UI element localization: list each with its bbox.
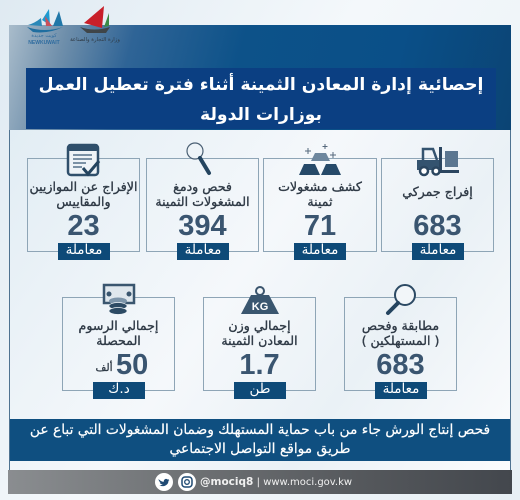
footer bar: [8, 470, 512, 494]
title: [39, 72, 483, 125]
label: [362, 318, 439, 348]
logo: ministry dhow: [80, 6, 110, 33]
logo text: New Kuwait: NEWKUWAIT: [28, 40, 60, 46]
card: total weight: [203, 297, 316, 391]
badge: [294, 243, 346, 260]
card: scales release: [27, 158, 140, 252]
label: [30, 179, 137, 210]
icon: twitter: [155, 473, 173, 491]
label: ثمينة: [307, 194, 333, 208]
badge: معاملة: [420, 242, 456, 258]
badge: معاملة: [383, 381, 419, 397]
label: [155, 179, 250, 210]
title: إحصائية إدارة المعادن الثمينة أثناء فترة تعطيل العمل: [39, 75, 483, 95]
number: 50: [116, 349, 148, 381]
card: precious items detection: [263, 158, 377, 252]
icon: KG weight: [241, 286, 279, 314]
main white panel: [9, 130, 511, 470]
social handle and website: @mociq8 | www.moci.gov.kw: [200, 476, 352, 488]
card: customs release: [381, 158, 494, 252]
badge: معاملة: [302, 242, 338, 258]
label: إجمالي الرسوم: [79, 318, 158, 333]
logo text: New Kuwait: [28, 33, 60, 46]
logo text: ministry: وزارة التجارة والصناعة: [70, 37, 120, 43]
header panel: [9, 25, 511, 130]
number: 683: [413, 210, 462, 242]
logo text: New Kuwait: كويت جديدة: [31, 33, 57, 39]
number: 683: [376, 349, 425, 381]
label: كشف مشغولات: [278, 179, 362, 194]
badge: [234, 382, 286, 399]
bottom message band: طريق مواقع التواصل الاجتماعي: [169, 441, 351, 457]
icon: magnifier: [386, 284, 416, 316]
label: فحص ودمغ: [173, 179, 232, 194]
card: total fees: [62, 297, 175, 391]
badge: د.ك: [108, 381, 130, 397]
icon: instagram: [178, 473, 196, 491]
number: 394: [178, 210, 227, 242]
badge: [58, 243, 110, 260]
number: 1.7: [239, 349, 280, 381]
label: إفراج جمركي: [402, 184, 473, 199]
number: 23: [67, 210, 100, 242]
label: [79, 318, 158, 348]
title box: [26, 68, 496, 129]
bottom message band: [10, 419, 510, 461]
label: المعادن الثمينة: [221, 332, 298, 348]
badge: [375, 382, 427, 399]
logo: New Kuwait: [27, 9, 63, 32]
label: ( المستهلكين ): [362, 332, 439, 348]
label: المشغولات الثمينة: [155, 194, 250, 208]
label: [278, 179, 362, 208]
card: inspect and stamp: [146, 158, 259, 252]
label: مطابقة وفحص: [362, 318, 439, 333]
icon: gold bars: [299, 144, 341, 175]
label: إجمالي وزن: [228, 318, 291, 333]
card: matching and consumers: [344, 297, 457, 391]
icon: forklift: [417, 147, 459, 176]
badge: معاملة: [66, 242, 102, 258]
icon: money and coins: [102, 284, 136, 314]
bottom message band: فحص إنتاج الورش جاء من باب حماية المستهلك وضمان المشغولات التي تباع عن: [30, 422, 490, 438]
label: والمقاييس: [56, 194, 111, 208]
badge: [177, 243, 229, 260]
icon: magnifier: [186, 142, 212, 176]
badge: معاملة: [185, 242, 221, 258]
number: 71: [304, 210, 336, 242]
label: الإفراج عن الموازيين: [30, 179, 137, 194]
title: بوزارات الدولة: [200, 105, 322, 125]
icon: checklist: [66, 144, 100, 176]
label: المحصلة: [96, 332, 141, 348]
icon: KG weight: KG: [252, 301, 268, 313]
badge: [412, 243, 464, 260]
badge: طن: [249, 381, 271, 397]
unit: thousand: ألف: [96, 362, 112, 374]
badge: [93, 382, 145, 399]
label: [221, 318, 298, 348]
